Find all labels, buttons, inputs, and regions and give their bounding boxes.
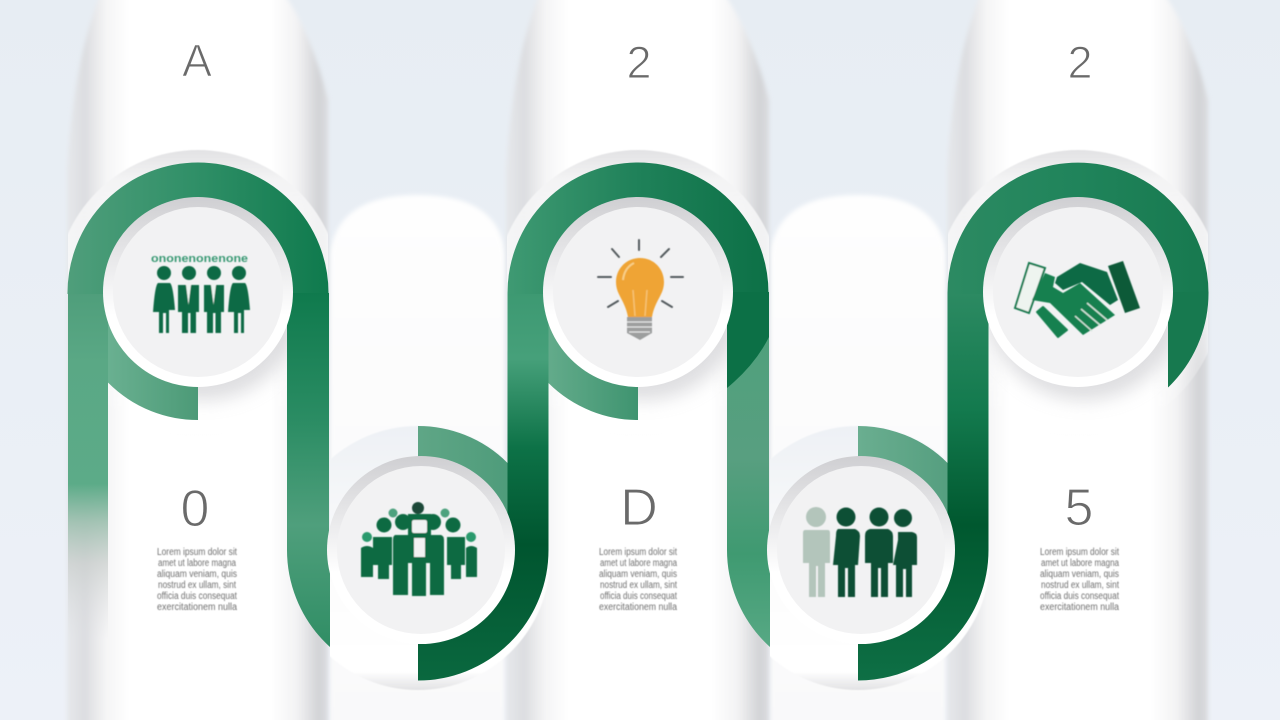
text block: column 5: amet ut labore magna	[1041, 558, 1119, 569]
text block: column 3: aliquam veniam, quis	[599, 569, 677, 580]
heading 0: 0	[181, 480, 209, 538]
tall column 5	[947, 0, 1208, 720]
plate shadow 3	[546, 204, 742, 400]
text block: column 3: amet ut labore magna	[600, 558, 677, 569]
icon: handshake	[1015, 261, 1140, 337]
heading 2 right: 2	[1067, 37, 1093, 88]
plate 4	[767, 456, 955, 644]
halo: circle 1	[68, 150, 328, 280]
ribbon: lighter stripe of column 3	[727, 337, 770, 647]
icon: crowd of people	[361, 502, 477, 596]
text block: column 3: nostrud ex ullam, sint	[600, 580, 677, 591]
heading 5: 5	[1065, 479, 1093, 537]
text block: column 3	[599, 547, 677, 613]
plate shadow 5	[986, 204, 1182, 400]
text block: column 1: exercitationem nulla	[157, 602, 237, 613]
inner light arc: circle 2	[418, 426, 508, 513]
icon: four people with caption row	[151, 253, 250, 333]
text block: column 5: exercitationem nulla	[1040, 602, 1119, 613]
halo: circle 5	[948, 150, 1208, 377]
icon: light bulb	[598, 240, 683, 340]
heading D: D	[620, 479, 658, 537]
text block: column 3: Lorem ipsum dolor sit	[599, 547, 677, 558]
text block: column 1: nostrud ex ullam, sint	[158, 580, 236, 591]
plate 3	[543, 197, 733, 387]
heading A: A	[182, 35, 212, 86]
halo: circle 4	[770, 426, 986, 690]
icon: four silhouettes	[803, 507, 917, 597]
ribbon: dark curve under circle 4 rising to column 5	[858, 293, 968, 660]
plate 2	[327, 456, 515, 644]
text block: column 5: aliquam veniam, quis	[1040, 569, 1119, 580]
ribbon: dark curve under circle 2 rising to column 3	[418, 293, 528, 660]
ribbon: left stripe of column 1	[68, 294, 108, 640]
heading 2: 2	[626, 37, 652, 88]
text block: column 1: officia duis consequat	[157, 591, 237, 602]
inner light arc: circle 1	[108, 322, 198, 420]
plate 5	[983, 197, 1173, 387]
text block: column 5: nostrud ex ullam, sint	[1041, 580, 1119, 591]
text block: column 5: Lorem ipsum dolor sit	[1040, 547, 1119, 558]
text block: column 1: aliquam veniam, quis	[157, 569, 237, 580]
ribbon: end of arch 5	[1168, 292, 1208, 388]
text block: column 3: officia duis consequat	[600, 591, 677, 602]
plate 1	[103, 197, 293, 387]
tall column 3	[506, 0, 769, 720]
short column 2	[330, 195, 505, 720]
tall column 1	[67, 0, 328, 720]
text block: column 5	[1040, 547, 1119, 613]
halo: circle 2	[330, 426, 546, 690]
inner light arc: circle 3	[548, 324, 638, 420]
text block: column 5: officia duis consequat	[1040, 591, 1119, 602]
halo: circle 3	[507, 150, 769, 348]
text block: column 1	[157, 547, 237, 613]
ribbon: arch over circle 3	[528, 183, 748, 294]
ribbon: arch over circle 1	[88, 183, 308, 294]
ribbon: arch over circle 5	[968, 183, 1188, 294]
text block: column 3: exercitationem nulla	[599, 602, 677, 613]
inner light arc: circle 4	[858, 426, 948, 513]
ribbon: right stripe of column 1	[287, 293, 330, 647]
plate shadow 1	[106, 204, 302, 400]
ribbon: dark end of arch 3	[727, 292, 769, 388]
short column 4	[770, 195, 946, 720]
text block: column 1: amet ut labore magna	[158, 558, 236, 569]
text block: column 1: Lorem ipsum dolor sit	[157, 547, 237, 558]
icon: four people with caption row: ononenonenone	[151, 253, 248, 265]
